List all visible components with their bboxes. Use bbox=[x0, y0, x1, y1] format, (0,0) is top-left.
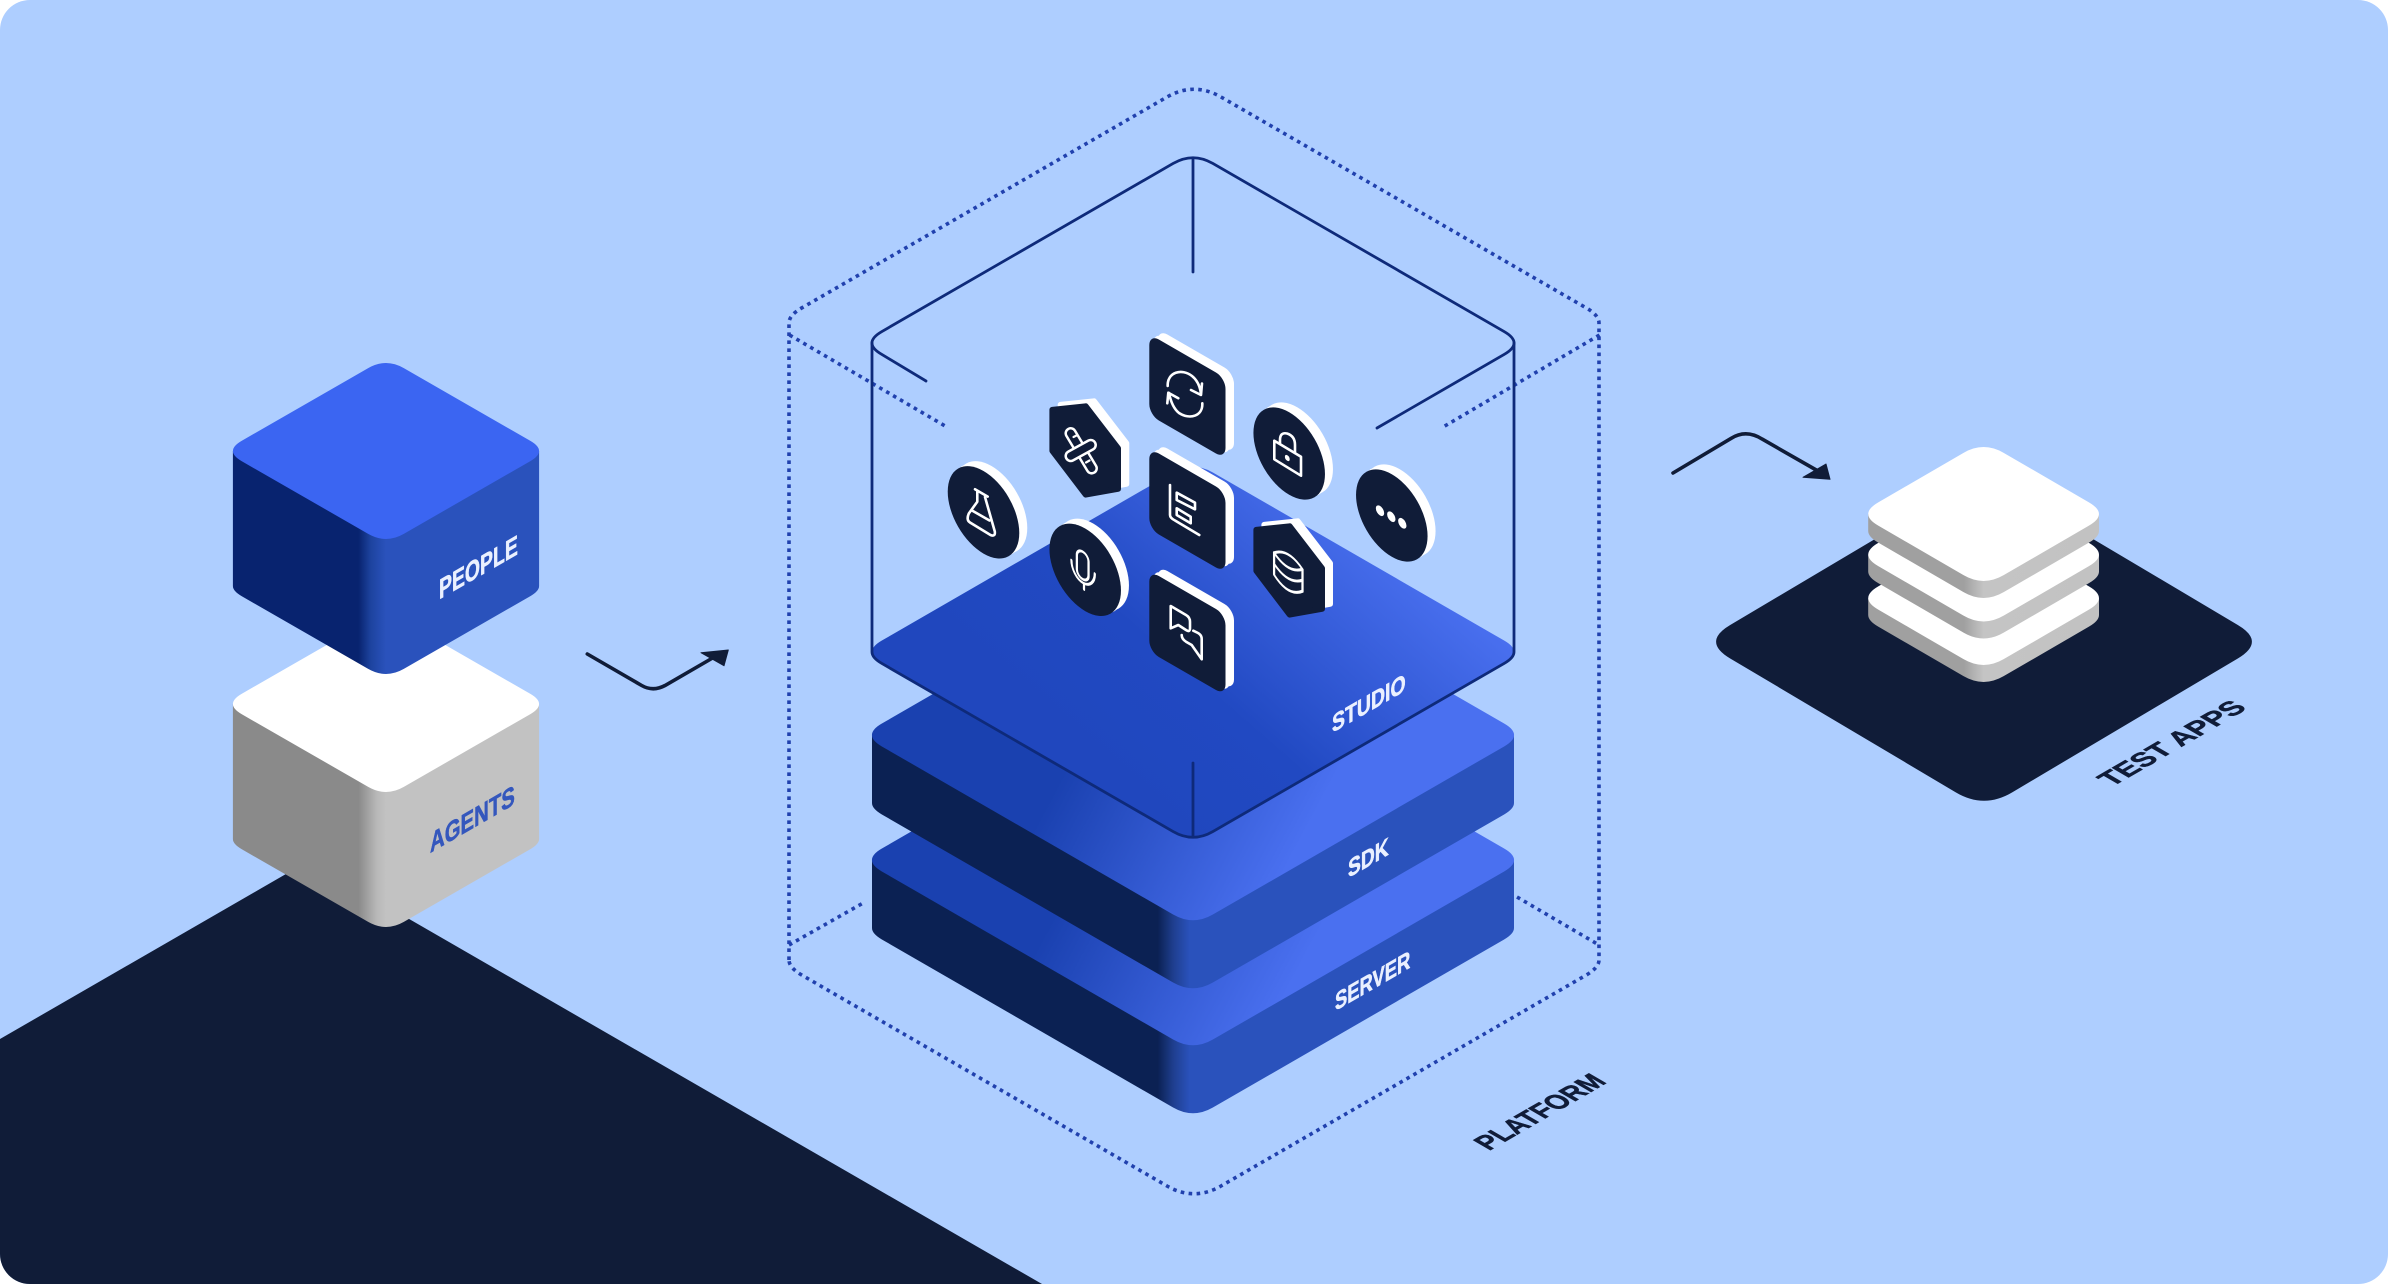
layer: studio plate bbox=[872, 467, 1514, 837]
platform outer dotted outline bbox=[789, 89, 1600, 1194]
icon: refresh tile bbox=[1149, 329, 1234, 459]
studio glass box outline bbox=[872, 158, 1514, 837]
icon: tools tile bbox=[1052, 401, 1126, 495]
icon: flask tile bbox=[948, 445, 1027, 574]
people cube bbox=[233, 363, 539, 674]
label: studio: STUDIO bbox=[1332, 668, 1406, 739]
test apps base pad bbox=[1716, 483, 2252, 801]
icon: microphone tile bbox=[1049, 503, 1129, 632]
icon: database tile bbox=[1256, 521, 1330, 615]
dark ground plane bbox=[0, 861, 1042, 1284]
test apps stack bbox=[1868, 447, 2099, 682]
label: test apps: TEST APPS bbox=[2090, 696, 2253, 790]
icon: more dots tile bbox=[1356, 449, 1436, 577]
stack layer: bottom bbox=[1868, 531, 2099, 682]
layer: server bbox=[872, 675, 1514, 1113]
label: agents: AGENTS bbox=[430, 779, 515, 859]
icon: chat tile bbox=[1149, 566, 1234, 696]
icon: chart tile bbox=[1149, 443, 1234, 573]
arrow: platform to test apps bbox=[1673, 434, 1830, 479]
label: platform: PLATFORM bbox=[1467, 1070, 1614, 1155]
label: people: PEOPLE bbox=[439, 529, 518, 606]
stack layer: middle bbox=[1868, 488, 2099, 638]
label: server: SERVER bbox=[1335, 945, 1410, 1017]
layer: sdk bbox=[872, 550, 1514, 988]
agents cube bbox=[233, 616, 539, 927]
arrow: people and agents to platform bbox=[587, 650, 728, 689]
label: sdk: SDK bbox=[1348, 832, 1389, 884]
icon: lock tile bbox=[1253, 387, 1333, 515]
stack layer: top bbox=[1868, 447, 2099, 598]
